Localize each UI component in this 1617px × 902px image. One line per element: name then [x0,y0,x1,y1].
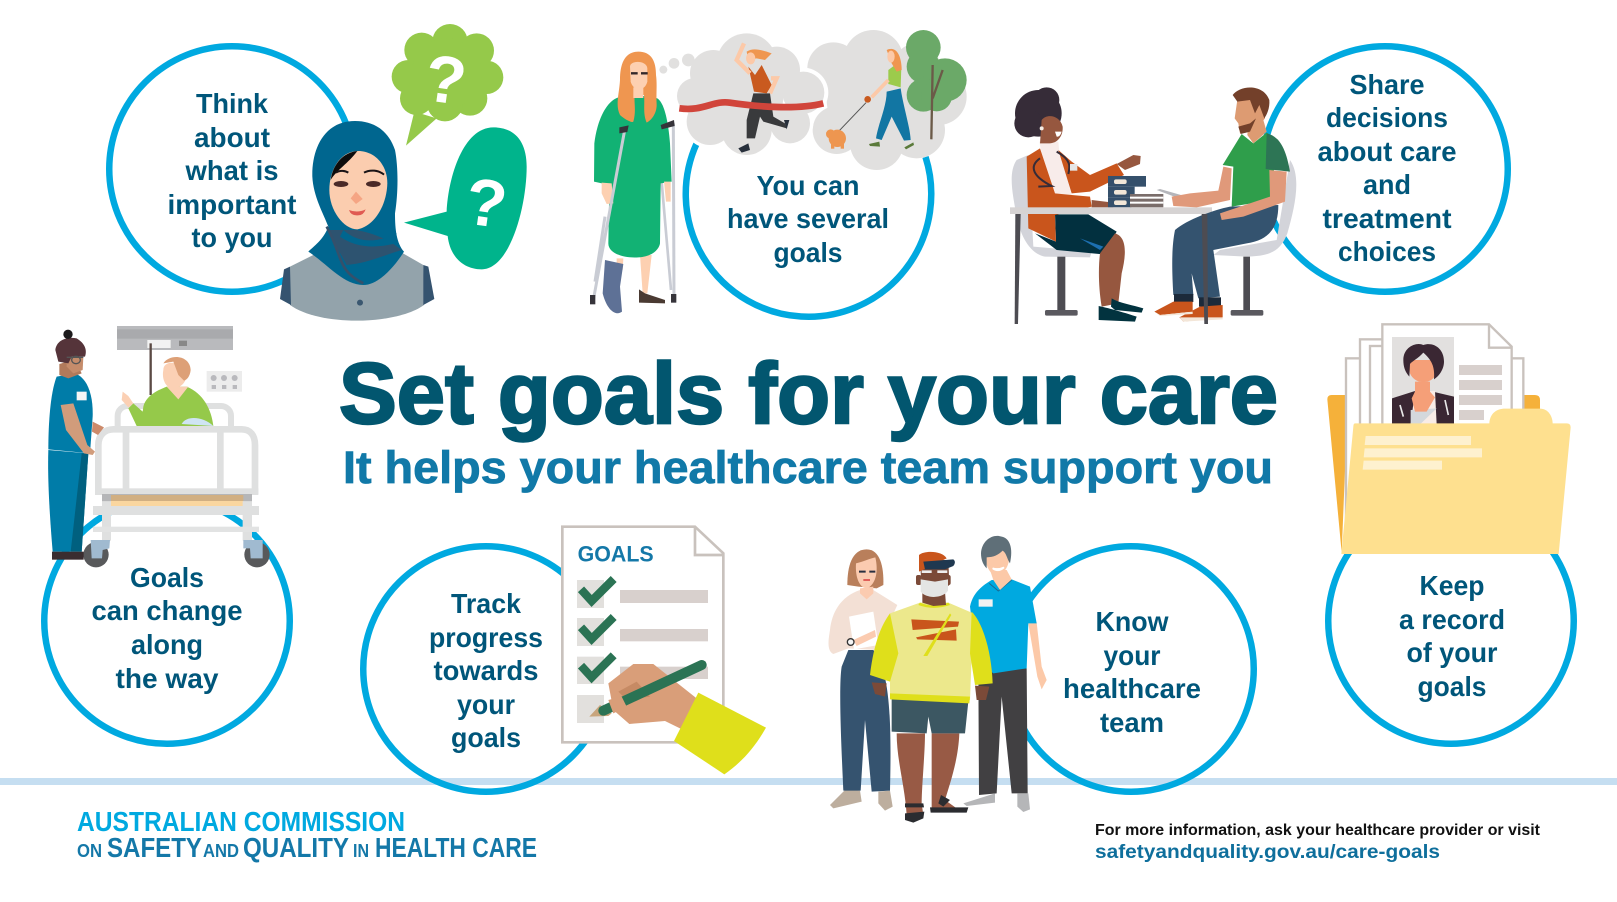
panel text: keep a record: a record [1399,604,1505,635]
panel text: share decisions: Share [1350,69,1424,100]
icon: three healthcare team members [829,536,1047,823]
panel text: think: about [194,122,270,153]
panel text: goals can change: can change [92,595,242,626]
panel: track progress [363,527,766,792]
panel text: think: important [168,189,296,220]
panel text: several goals [727,170,889,268]
panel text: goals can change [92,562,242,694]
panel: goals can change along the way [44,326,290,744]
panel text: think: Think [196,88,268,119]
panel text: track progress: towards [434,655,538,686]
panel text: several goals: have several [727,203,889,234]
panel: you can have several goals [590,30,967,317]
panel text: think: what is [185,155,278,186]
panel text: know your team: your [1104,640,1161,671]
icon: folder with patient record [1327,324,1571,554]
panel: keep a record of your goals [1327,324,1574,744]
icon: woman in hijab with question bubbles [280,24,527,321]
icon: doctor and patient at a desk [1010,87,1296,324]
panel: think about what is important [109,24,527,321]
footer: more information: For more information, ask your healthcare provider or visit [1095,822,1541,839]
panel text: know your team: team [1100,707,1164,738]
panel text: goals can change: Goals [130,562,204,593]
logo: Australian Commission on Safety and Quality in Health Care: ON [77,841,102,861]
panel text: goals can change: the way [116,663,219,694]
subtitle: It helps your healthcare team support you [343,442,1273,493]
panel text: track progress: goals [451,722,521,753]
logo: Australian Commission on Safety and Quality in Health Care: AUSTRALIAN COMMISSION [77,806,405,837]
panel text: track progress: your [457,689,515,720]
icon: woman in hijab with question bubbles: ? [461,164,511,243]
panel text: share decisions [1318,69,1456,267]
panel text: track progress: Track [451,588,521,619]
logo: Australian Commission on Safety and Quality in Health Care: QUALITY [243,832,349,863]
icon: nurse and patient in hospital bed [48,326,270,567]
panel text: share decisions: decisions [1326,102,1448,133]
logo: Australian Commission on Safety and Quality in Health Care: SAFETY [107,832,202,863]
panel text: keep a record [1399,570,1505,702]
icon: woman in hijab with question bubbles: ? [420,41,471,120]
logo: Australian Commission on Safety and Quality in Health Care: HEALTH CARE [375,832,537,863]
panel text: share decisions: treatment [1322,203,1452,234]
icon: goals checklist and writing hand: GOALS [578,542,654,567]
footer: more information [1095,822,1541,863]
icon: woman on crutches thinking of goals [590,30,967,313]
panel: share decisions [1010,46,1508,324]
panel text: keep a record: goals [1418,671,1486,702]
panel text: track progress [429,588,543,753]
panel text: goals can change: along [131,629,203,660]
panel text: think [168,88,296,253]
title: Set goals for your care [339,346,1278,442]
panel text: share decisions: choices [1338,236,1436,267]
icon: goals checklist and writing hand [562,527,766,774]
panel text: track progress: progress [429,622,543,653]
panel text: think: to you [192,222,272,253]
logo: Australian Commission on Safety and Quality in Health Care: AND [203,841,239,861]
panel text: know your team: healthcare [1063,673,1201,704]
panel text: know your team: Know [1096,606,1169,637]
logo: Australian Commission on Safety and Quality in Health Care [77,806,537,863]
logo: Australian Commission on Safety and Quality in Health Care: IN [353,841,369,861]
panel text: share decisions: and [1363,169,1411,200]
panel text: keep a record: Keep [1420,570,1484,601]
panel text: several goals: You can [756,170,860,201]
panel text: keep a record: of your [1406,637,1498,668]
panel text: share decisions: about care [1318,136,1456,167]
footer: more information: safetyandquality.gov.au/care-goals [1095,841,1440,863]
panel text: know your team [1063,606,1201,738]
panel text: several goals: goals [774,237,842,268]
panel: know your healthcare team [829,536,1254,823]
